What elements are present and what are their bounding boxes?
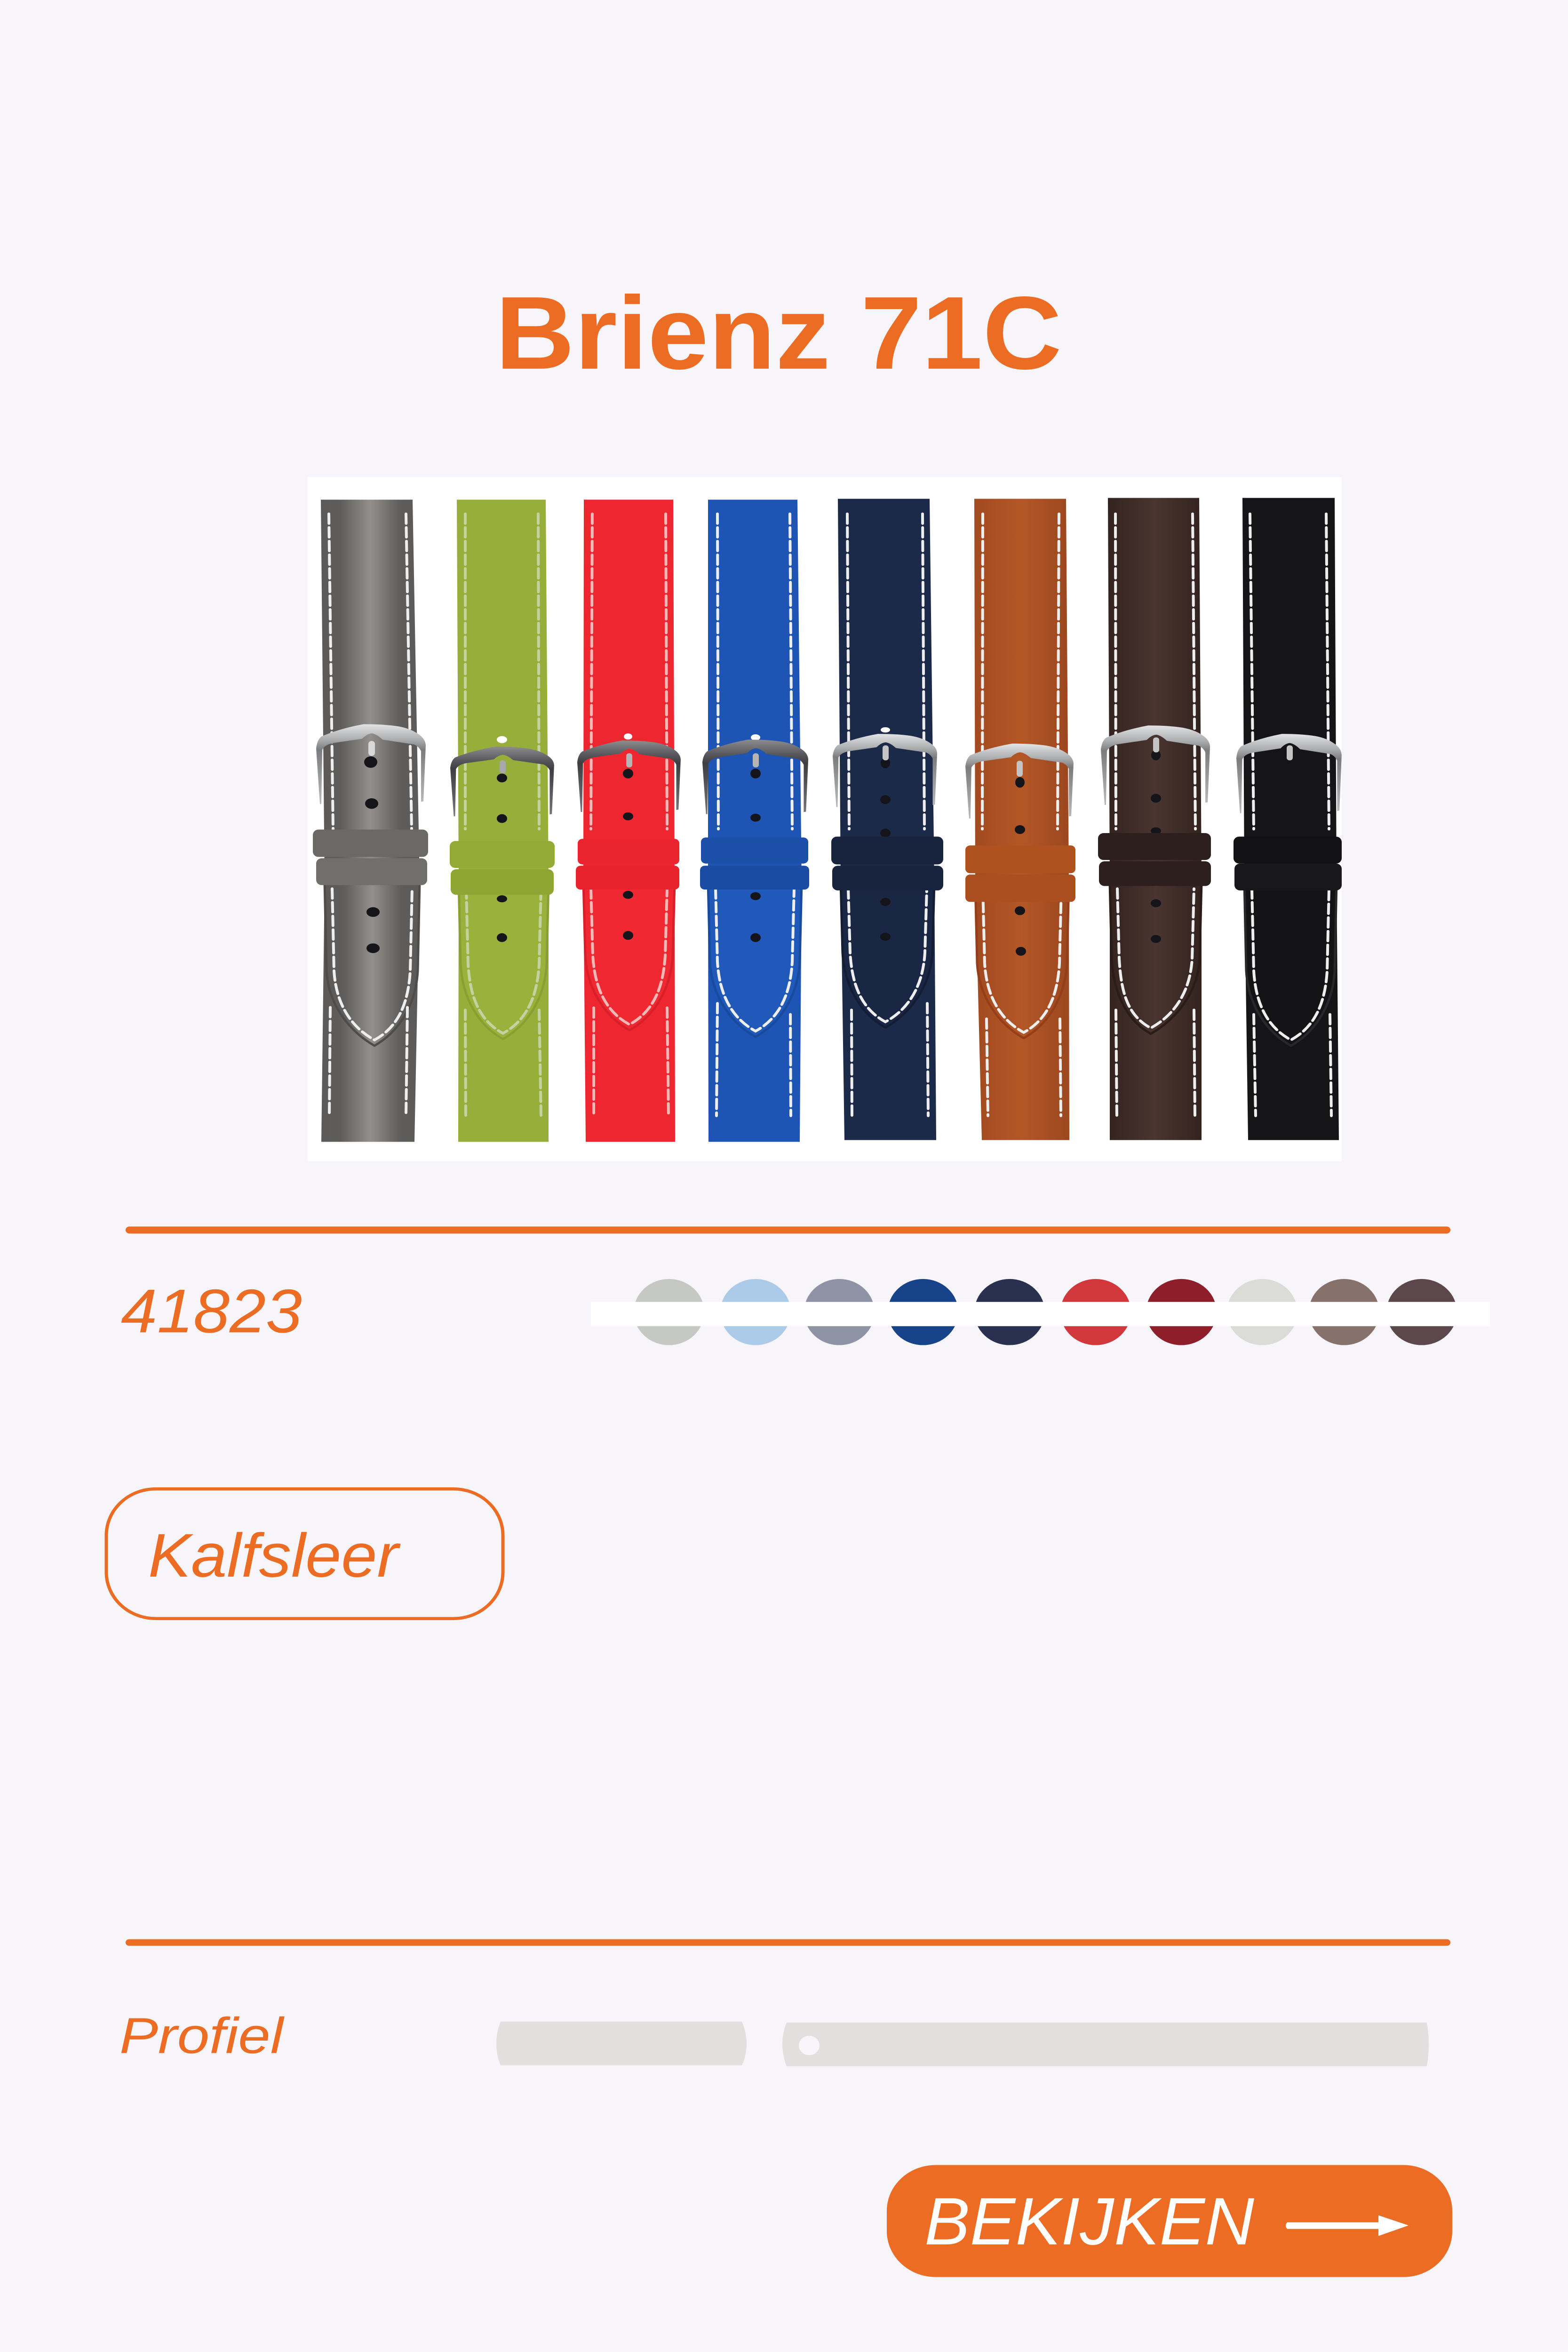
title: Brienz 71C: [495, 276, 1062, 391]
product photo: eight watch straps: [308, 477, 1342, 1161]
button label: BEKIJKEN: [924, 2185, 1255, 2259]
long profile piece: [782, 2023, 1429, 2066]
divider bottom: [126, 1939, 1450, 1946]
swatch: light blue: [720, 1279, 791, 1345]
tag outline: [106, 1489, 503, 1619]
swatch: red: [1060, 1279, 1131, 1345]
strap: grey: [313, 500, 428, 1142]
swatch: navy: [974, 1279, 1045, 1345]
strap: dark brown: [1098, 498, 1211, 1140]
article number: 41823: [121, 1276, 302, 1345]
swatch: steel grey: [804, 1279, 875, 1345]
button background: [887, 2165, 1452, 2277]
swatch: taupe: [1309, 1279, 1379, 1345]
short profile piece: [496, 2022, 747, 2066]
material tag: [106, 1489, 503, 1619]
swatch: pale grey: [1227, 1279, 1297, 1345]
swatch: royal blue: [888, 1279, 958, 1345]
strap: blue: [700, 500, 809, 1142]
icon: arrow: [1286, 2215, 1409, 2236]
swatch: dark red: [1146, 1279, 1217, 1345]
tag label: Kalfsleer: [148, 1521, 401, 1590]
strap: navy: [831, 499, 943, 1140]
photo white backdrop: [308, 477, 1342, 1161]
divider top: [126, 1226, 1450, 1233]
swatch: dark taupe: [1386, 1279, 1457, 1345]
white band across swatches: [591, 1302, 1490, 1326]
strap: red: [576, 500, 681, 1142]
profile hole: [799, 2036, 820, 2055]
button: [887, 2165, 1452, 2277]
profile label: Profiel: [119, 2007, 285, 2064]
strap: black: [1234, 498, 1342, 1140]
swatch: light grey: [634, 1279, 704, 1345]
strap profile silhouette: [496, 2022, 1429, 2066]
strap: cognac brown: [965, 499, 1075, 1140]
strap: green: [450, 500, 555, 1142]
colour swatches: [591, 1279, 1490, 1345]
